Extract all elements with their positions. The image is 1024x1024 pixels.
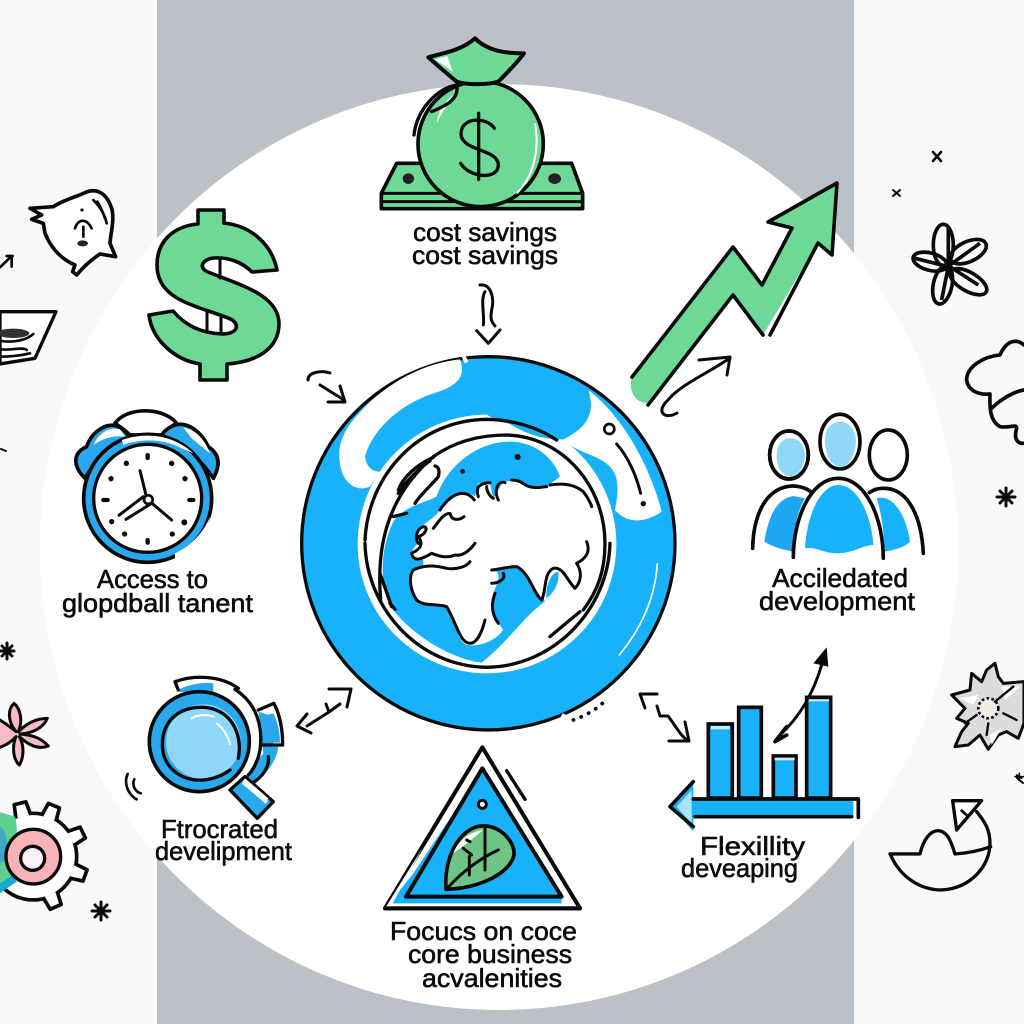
label: access to global talent: glopdball tanent xyxy=(62,588,254,618)
icon: pink flower xyxy=(0,703,48,765)
label: orchestrated development: Ftrocrated xyxy=(161,814,278,844)
label: focus on core business activities: acvalenities xyxy=(422,963,562,993)
icon: dish of coins xyxy=(0,312,56,364)
arrow: lower left of globe xyxy=(297,689,351,733)
arrow: cost savings to globe xyxy=(477,285,500,343)
label: accelerated development xyxy=(759,563,916,616)
heading: cost savings: cost savings xyxy=(413,217,557,247)
icon: five-petal flower xyxy=(911,224,991,306)
label: flexibility developing xyxy=(681,831,805,883)
icon: large green dollar sign xyxy=(149,210,279,380)
label: orchestrated development xyxy=(155,814,293,866)
heading: cost savings: cost savings xyxy=(412,240,558,270)
label: accelerated development: Acciledated xyxy=(772,563,908,593)
white highlight patches on ring xyxy=(339,359,662,520)
label: focus on core business activities xyxy=(390,916,577,993)
arrow: lower right of globe xyxy=(640,694,689,741)
label: focus on core business activities: core business xyxy=(408,939,572,969)
icon: green rising arrow xyxy=(631,183,837,405)
icon: alarm clock xyxy=(76,411,218,562)
icon: magnifying glass xyxy=(126,677,283,818)
icon: globe xyxy=(302,356,675,730)
label: accelerated development: development xyxy=(759,586,916,616)
label: orchestrated development: develipment xyxy=(155,836,293,866)
ocean on globe xyxy=(383,442,560,663)
label: flexibility developing: deveaping xyxy=(681,853,798,883)
decorative asterisks xyxy=(0,152,1023,920)
ring outlines xyxy=(365,419,610,667)
arrow: small arrow beneath green arrow xyxy=(662,357,730,416)
label: flexibility developing: Flexillity xyxy=(700,831,805,861)
label: focus on core business activities: Focucs on coce xyxy=(390,916,577,946)
label: access to global talent: Access to xyxy=(97,564,208,594)
heading: cost savings xyxy=(412,217,558,270)
arrow: top left to globe xyxy=(308,372,345,402)
label: access to global talent xyxy=(62,564,254,618)
icon: gear with green blob xyxy=(0,801,88,910)
icon: grey flower xyxy=(952,663,1024,781)
icon: piggy doodle xyxy=(0,191,116,275)
icon: cloud doodle xyxy=(967,341,1024,443)
icon: three people xyxy=(753,414,923,558)
icon: money bag with banknotes xyxy=(381,38,583,209)
land masses xyxy=(412,480,601,600)
icon: triangle with leaf xyxy=(385,747,580,908)
icon: bar chart with left arrow xyxy=(670,647,858,832)
icon: bowl with curved arrow xyxy=(890,801,991,890)
